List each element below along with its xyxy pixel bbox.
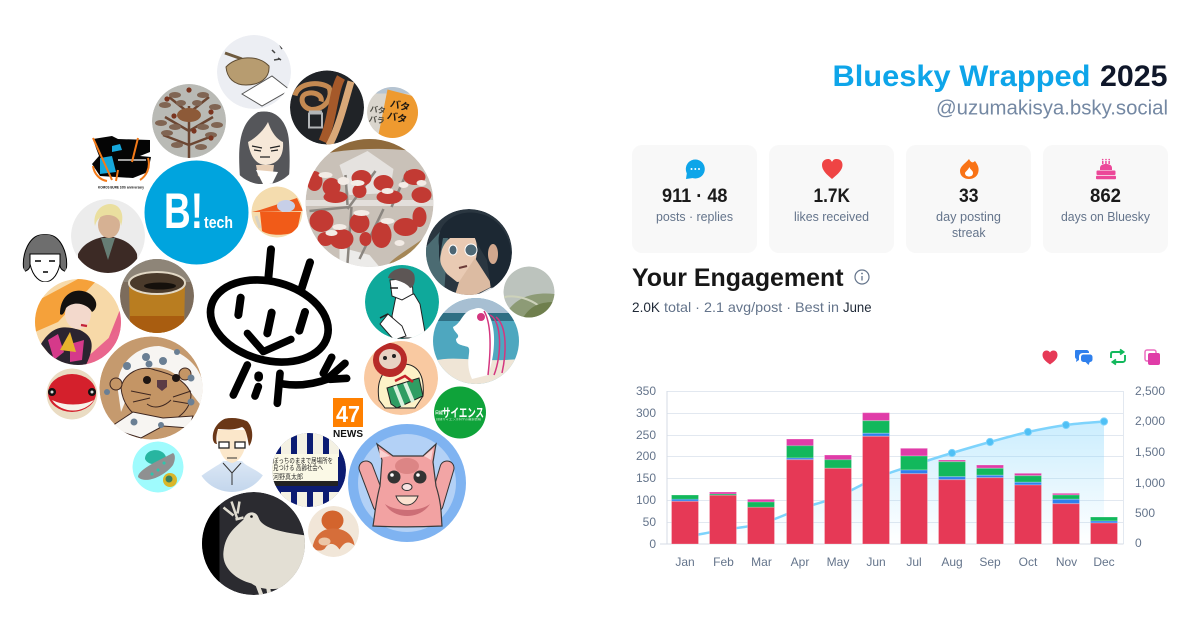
month labels: Mar [751,555,772,569]
left axis labels: 200 [636,449,656,463]
avatar: handwritten bata-bata sign [367,87,418,138]
left axis labels: 250 [636,428,656,442]
avatar: book cover [272,433,346,512]
bar: June [862,413,890,544]
avatar: handwritten bata-bata sign: バタ [386,110,408,126]
icon: birthday cake [1096,159,1116,179]
avatar: man on teal background [365,265,439,340]
bar: February [710,492,736,544]
avatar: white dove on dark cloth [202,492,306,596]
right axis labels: 0 [1135,536,1142,550]
avatar: weasel in a polka-dot headscarf [100,336,203,440]
icon: flame [960,159,979,179]
right axis labels: 2,500 [1135,384,1165,398]
avatar: woman in colourful kimono [35,279,121,365]
stat value: 33 [959,186,978,207]
avatar: pink sugar glider cat [348,424,466,542]
bar: October [1014,473,1042,544]
avatar: book cover: ぼっちのままで居場所を [273,456,333,465]
avatar: coffee mug [120,259,194,333]
bar: September [976,465,1004,544]
title: Bluesky Wrapped [832,60,1090,93]
month labels: Jan [675,555,695,569]
avatar: green science logo: 日経 [435,409,443,415]
user handle: @uzumakisya.bsky.social [936,98,1168,120]
stat value: 911 · 48 [662,186,728,207]
cumulative area [685,422,1104,544]
month labels: Nov [1056,555,1077,569]
avatar: leather belt [290,70,364,146]
avatar: illustrated man with glasses [202,418,263,492]
icon: info [855,270,869,284]
bar: January [672,495,698,544]
bar: August [938,460,966,544]
left axis labels: 0 [649,537,656,551]
right axis labels: 500 [1135,506,1155,520]
avatar: book cover: 河野真太郎 [273,472,303,481]
cumulative line [685,422,1104,537]
avatar: B!tech logo: B! [164,183,203,239]
stat label: days on Bluesky [1061,209,1150,224]
month labels: Jul [906,555,922,569]
icon: heart [822,159,842,179]
engagement chart [636,384,1165,569]
right axis labels: 1,500 [1135,445,1165,459]
left axis labels: 300 [636,406,656,420]
month labels: Sep [979,555,1001,569]
avatar: handwritten bata-bata sign: バタ [369,104,386,116]
left axis labels: 100 [636,493,656,507]
bar: May [824,455,852,544]
stat card: likes received [769,145,894,253]
bar: April [786,439,814,544]
avatar: octopus [308,506,359,557]
section heading: Your Engagement [632,264,844,292]
left axis labels: 350 [636,384,656,398]
right axis labels [1135,384,1165,550]
stat value: 862 [1090,186,1121,207]
month labels: Dec [1093,555,1115,569]
avatar: green science logo: 日経サイエンス科学の最新情報 [436,417,482,421]
avatar: red fish plush [46,368,98,420]
avatar: handwritten bata-bata sign: バタ [389,98,411,114]
avatar: 47NEWS logo: 47 [336,401,360,427]
avatar bubble cloud [21,35,555,596]
stat label: day posting [936,209,1001,224]
engagement summary: 2.0K [632,299,661,315]
avatar: green science logo: サイエンス [442,406,484,420]
month labels [675,555,1115,569]
right axis labels: 1,000 [1135,476,1165,490]
legend: reposts [1111,350,1125,364]
cumulative points [910,418,1108,469]
stat card: days on Bluesky [1043,145,1168,253]
stat card: posting streak [906,145,1031,253]
avatar: UFO saucer [132,442,184,492]
legend: likes [1042,350,1058,364]
left axis labels [636,384,656,551]
avatar: rainbow over green hills [503,266,555,318]
stat label line two: streak [952,225,986,240]
engagement summary: total · 2.1 avg/post · Best in [664,299,839,315]
month labels: Aug [941,555,963,569]
avatar: 47NEWS logo [333,398,363,440]
month labels: Feb [713,555,734,569]
engagement summary: June [843,299,872,315]
avatar: handwritten bata-bata sign: バラ [368,115,385,126]
left axis labels: 50 [643,515,656,529]
stat card: posts and replies [632,145,757,253]
chart grid [660,391,1124,544]
left axis labels: 150 [636,471,656,485]
avatar: 47NEWS logo: NEWS [333,428,363,440]
avatar: B!tech logo: tech [204,213,233,232]
month labels: Jun [866,555,886,569]
bar: July [900,448,928,544]
avatar: horseshoe crab reading [217,35,291,109]
month labels: May [827,555,849,569]
centre: hand-drawn stick figure avatar [201,249,347,403]
avatar: man with blond hair [71,199,145,273]
month labels: Oct [1019,555,1038,569]
legend: quotes [1145,350,1160,365]
title: 2025 [1100,60,1168,93]
month labels: Apr [791,555,809,569]
bar: November [1052,493,1080,544]
stat label: posts · replies [656,209,733,224]
avatar: book cover: 見つける 高齢社会へ [273,463,323,472]
avatar: black and orange anniversary logo: KOMOS BURE 10th anniversary [98,186,144,190]
avatar: mascot with daruma and gift [364,338,438,415]
avatar: B!tech logo [144,160,248,264]
avatar: woman with long grey hair [239,112,290,184]
avatar: tree and bird plate [152,84,226,158]
avatar: anime girl with dark hair [426,209,512,295]
avatar: orange casserole pot [252,186,303,238]
legend: replies [1075,350,1092,365]
avatar: strawberry sandwiches in paper [306,139,434,267]
avatar: white creature on a tropical beach [433,298,519,384]
avatar: black and orange anniversary logo [92,136,151,190]
stacked monthly bars [672,413,1118,544]
bar: December [1090,517,1118,544]
right axis labels: 2,000 [1135,414,1165,428]
chart legend icons [1042,350,1160,365]
stat value: 1.7K [814,186,850,207]
stat label: likes received [794,209,869,224]
bar: March [748,499,774,544]
avatar: green science logo [434,386,486,438]
icon: chat bubble [686,160,705,179]
avatar: sketch of a girl with bob hair [21,234,69,282]
